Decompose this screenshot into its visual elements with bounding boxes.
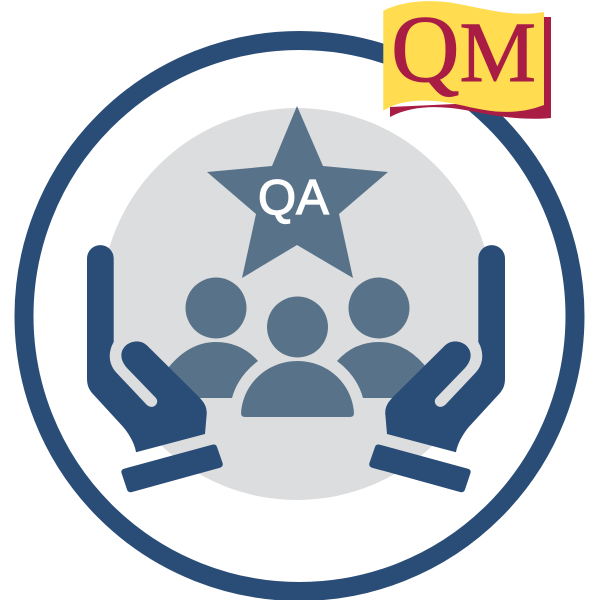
person: left (165, 278, 258, 398)
right hand palm (385, 245, 505, 452)
grey background circle (101, 108, 493, 500)
person: right (337, 278, 430, 398)
left hand palm (87, 245, 207, 452)
letter M: M (460, 4, 536, 100)
right hand (369, 245, 505, 492)
star with QA label: QA (258, 171, 329, 225)
left hand (87, 245, 223, 492)
left hand cuff (121, 444, 223, 492)
flag yellow field (383, 1, 544, 112)
flag shadow (390, 17, 551, 119)
QM lettering (391, 0, 536, 102)
person: centre (241, 296, 354, 417)
star with QA label (207, 106, 388, 278)
QM flag logo (383, 0, 551, 119)
right hand cuff (369, 444, 471, 492)
group of three people (165, 278, 430, 417)
